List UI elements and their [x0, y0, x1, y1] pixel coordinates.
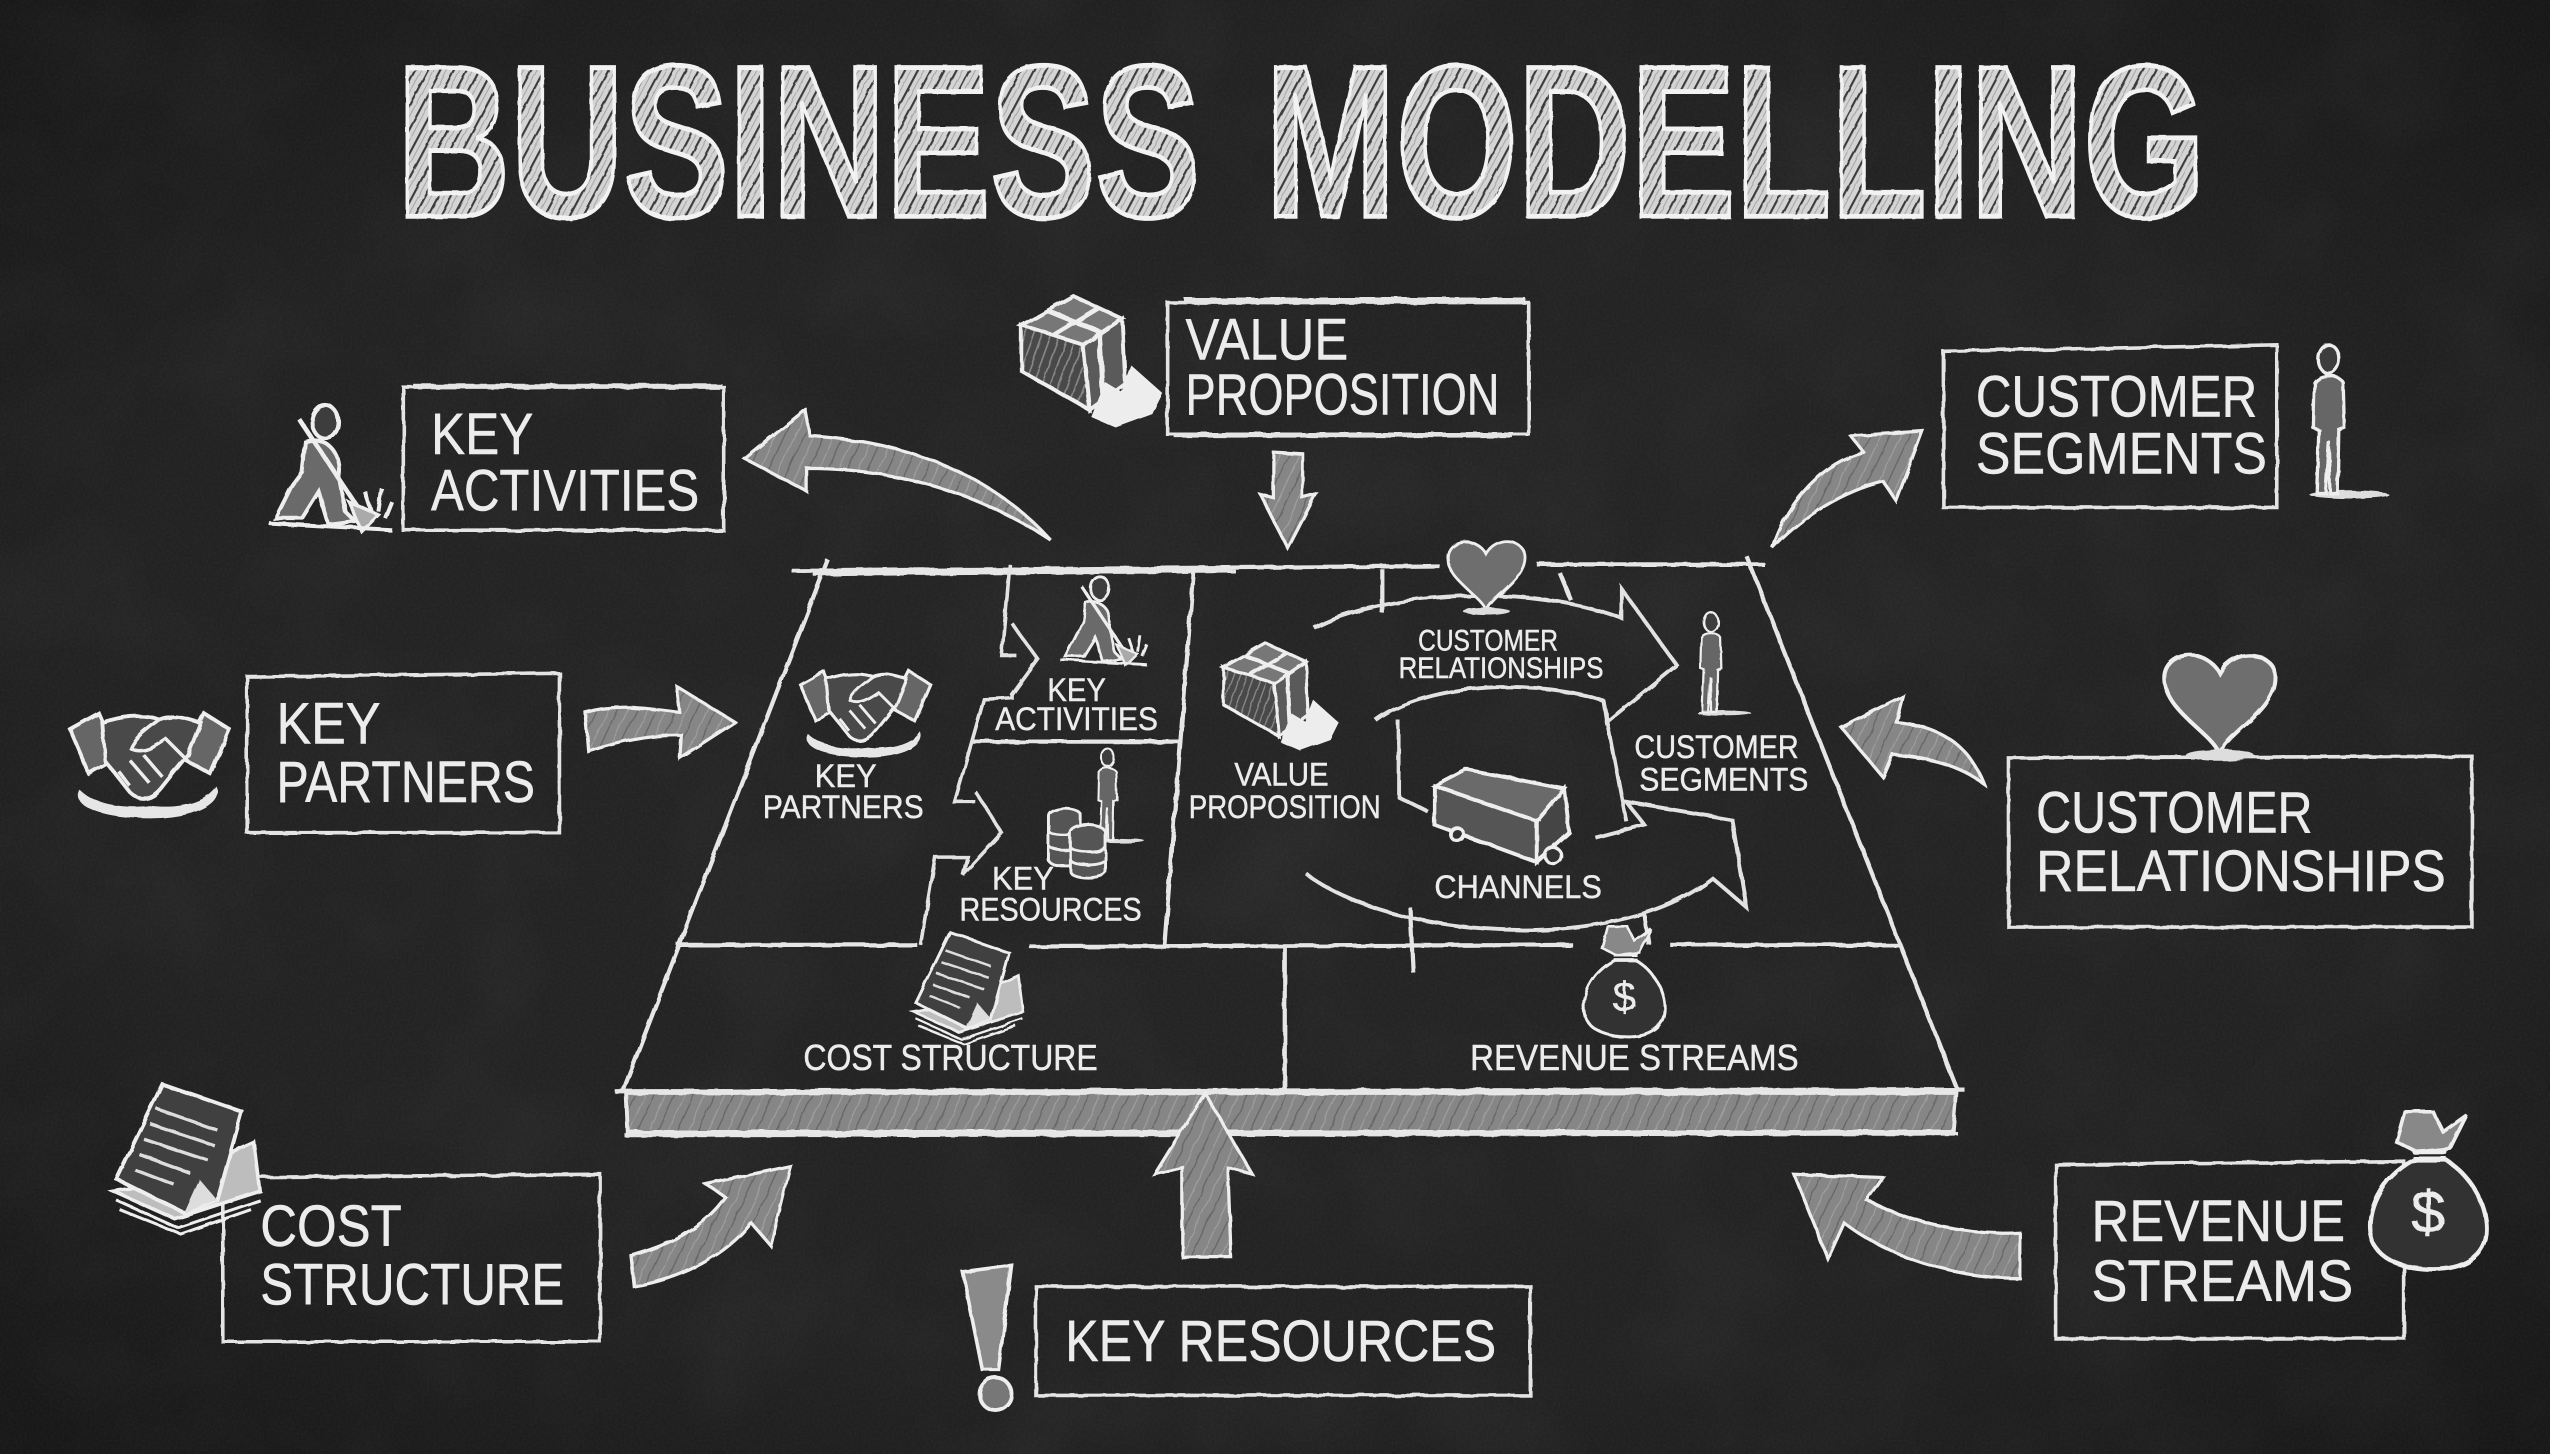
arrow: from customer relationships [1841, 696, 1984, 784]
box: cost structure: COST [260, 1194, 402, 1259]
icon: heart large [2164, 655, 2275, 761]
icon: documents large [113, 1084, 260, 1234]
board base band [626, 1093, 1956, 1132]
arrow: from key partners [585, 686, 735, 758]
icon: truck [1434, 769, 1569, 864]
title [397, 20, 2205, 262]
label: key partners: KEY [815, 758, 877, 794]
icon: person small [1697, 612, 1751, 716]
flow arrows: left column [920, 564, 1038, 945]
box: customer relationships: CUSTOMER [2036, 781, 2313, 846]
label: key resources [960, 861, 1142, 928]
label: cost structure: COST STRUCTURE [803, 1038, 1098, 1078]
label: key resources: RESOURCES [960, 892, 1142, 928]
box: value proposition: PROPOSITION [1186, 363, 1499, 428]
icon: money bag large [2370, 1112, 2487, 1269]
arrow: from cost structure [631, 1166, 790, 1286]
label: customer relationships: RELATIONSHIPS [1399, 653, 1604, 685]
arrow: to customer segments [1773, 431, 1922, 548]
icon: handshake large [70, 713, 229, 818]
label: key partners [763, 758, 924, 825]
box: key activities: KEY [431, 402, 533, 467]
arrow: from key resources [1155, 1093, 1252, 1257]
box: revenue streams: REVENUE [2091, 1189, 2345, 1254]
label: key activities: ACTIVITIES [995, 701, 1158, 737]
flow arrows: right column [1306, 589, 1747, 930]
label: customer relationships: CUSTOMER [1418, 626, 1558, 658]
box: key resources: KEY RESOURCES [1065, 1309, 1496, 1374]
icon: worker large [269, 405, 392, 531]
label: customer segments [1634, 729, 1808, 797]
icon: person and coins [1048, 749, 1144, 878]
icon: heart small [1448, 542, 1525, 615]
icon: documents small [914, 932, 1023, 1044]
icon: exclamation mark [963, 1265, 1012, 1410]
box: customer relationships: RELATIONSHIPS [2036, 839, 2446, 904]
icon: worker small [1060, 577, 1147, 666]
label: key activities [995, 672, 1158, 737]
arrow: to key activities [745, 410, 1051, 540]
box: customer segments [1943, 345, 2277, 507]
central canvas board [615, 542, 1965, 1135]
box: value proposition [1168, 299, 1529, 436]
label: key resources: KEY [992, 861, 1054, 897]
box: key activities: ACTIVITIES [431, 459, 699, 524]
box: revenue streams [2056, 1161, 2404, 1338]
label: value proposition [1189, 757, 1381, 825]
box: cost structure: STRUCTURE [260, 1252, 564, 1317]
icon: person large [2309, 345, 2389, 498]
arrow: value proposition down [1260, 452, 1316, 548]
label: channels: CHANNELS [1434, 869, 1602, 905]
label: customer segments: SEGMENTS [1639, 761, 1808, 797]
label: key partners: PARTNERS [763, 789, 924, 825]
label: value proposition: VALUE [1234, 757, 1329, 793]
label: customer relationships [1399, 626, 1604, 685]
box: revenue streams: STREAMS [2091, 1249, 2353, 1314]
box: cost structure [223, 1174, 600, 1342]
box: customer relationships [2008, 756, 2472, 927]
title: MODELLING [1265, 20, 2205, 262]
icon: money bag small [1584, 927, 1665, 1037]
box: key partners: KEY [276, 691, 381, 756]
board grid lines [615, 556, 1965, 1135]
label: value proposition: PROPOSITION [1189, 789, 1381, 825]
label: revenue streams: REVENUE STREAMS [1470, 1038, 1799, 1078]
label: customer segments: CUSTOMER [1634, 729, 1799, 765]
icon: box small [1223, 643, 1338, 750]
box: key partners [247, 673, 559, 833]
box: value proposition: VALUE [1186, 307, 1348, 372]
box: key resources [1036, 1286, 1530, 1395]
arrow: from revenue streams [1794, 1174, 2020, 1278]
icon: handshake small [800, 671, 930, 757]
box: key partners: PARTNERS [276, 750, 535, 815]
title: BUSINESS [397, 20, 1200, 262]
box: key activities [403, 385, 724, 530]
icon: box large [1021, 296, 1161, 426]
label: key activities: KEY [1047, 672, 1106, 708]
box: customer segments: SEGMENTS [1976, 421, 2267, 486]
box: customer segments: CUSTOMER [1976, 364, 2257, 429]
